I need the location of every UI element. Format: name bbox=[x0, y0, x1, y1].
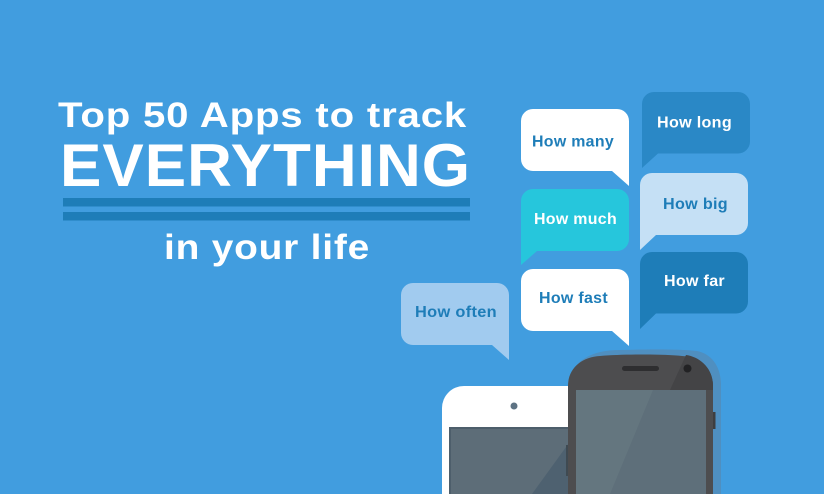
icon: white phone bbox=[442, 386, 575, 494]
double rule under title bbox=[63, 198, 470, 220]
bubble: How much bbox=[521, 189, 629, 265]
bubble: How far: How far bbox=[664, 273, 725, 290]
bubble: How many: How many bbox=[532, 134, 614, 150]
bubble: How big: How big bbox=[663, 196, 728, 213]
bubble: How many bbox=[521, 109, 629, 186]
bubble: How much: How much bbox=[534, 211, 617, 228]
bubble: How often: How often bbox=[415, 304, 497, 321]
bubble: How often bbox=[401, 283, 509, 360]
bubble: How fast: How fast bbox=[539, 290, 608, 307]
icon: dark phone bbox=[568, 349, 721, 494]
bubble: How big bbox=[640, 173, 748, 250]
bubble: How long bbox=[642, 92, 750, 168]
bubble: How far bbox=[640, 252, 748, 329]
title: Top 50 Apps to track: Top 50 Apps to track bbox=[58, 96, 467, 135]
subtitle: in your life: in your life bbox=[164, 228, 370, 267]
title: EVERYTHING: EVERYTHING bbox=[60, 132, 471, 199]
bubble: How long: How long bbox=[657, 114, 732, 132]
bubble: How fast bbox=[521, 269, 629, 346]
